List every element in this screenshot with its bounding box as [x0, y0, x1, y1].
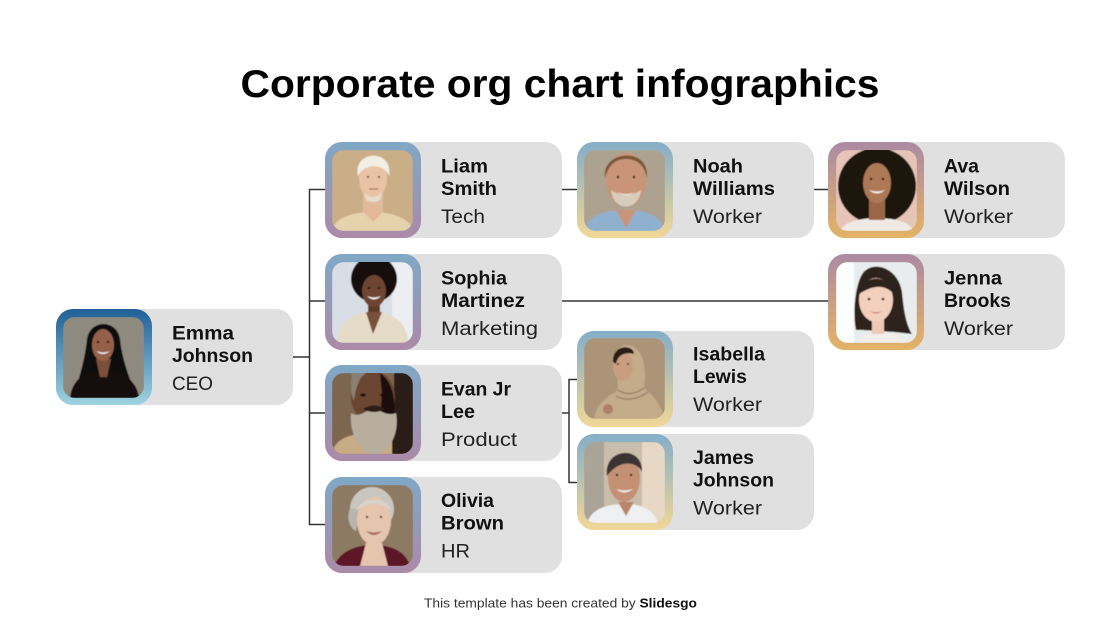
photo frame: [325, 365, 421, 461]
photo frame: [828, 254, 924, 350]
portrait: Noah: [584, 150, 665, 231]
card: Olivia Brown, HR: [325, 477, 562, 573]
portrait: Olivia: [332, 485, 413, 566]
card: Evan Jr Lee, Product: Lee: [441, 402, 475, 423]
role: Tech: [441, 207, 485, 228]
portrait: Jenna: [836, 262, 917, 343]
card: Ava Wilson, Worker: Wilson: [944, 179, 1010, 200]
portrait: Evan: [332, 371, 413, 454]
card: Noah Williams, Worker: [577, 142, 814, 238]
name: Olivia: [441, 491, 494, 512]
role: Product: [441, 430, 518, 451]
card: Sophia Martinez, Marketing: Martinez: [441, 291, 525, 312]
photo frame: [577, 331, 673, 427]
portrait: Liam: [332, 150, 413, 231]
name: Sophia: [441, 268, 507, 290]
photo frame: [828, 142, 924, 238]
name: Evan Jr: [441, 380, 512, 400]
name: Isabella: [693, 344, 765, 366]
card: Olivia Brown, HR: Brown: [441, 514, 504, 534]
portrait: Sophia: [332, 256, 413, 343]
role: CEO: [172, 374, 213, 395]
photo frame: [577, 434, 673, 530]
name: Jenna: [944, 268, 1002, 290]
footer credit: This template has been created by Slidesgo: [424, 596, 697, 610]
name: Ava: [944, 156, 979, 178]
title: Corporate org chart infographics: [240, 63, 880, 106]
role: Worker: [944, 319, 1014, 340]
connector lines: [293, 190, 828, 524]
card: Emma Johnson, CEO: Johnson: [172, 346, 253, 367]
name: Liam: [441, 156, 488, 178]
card: Jenna Brooks, Worker: [828, 254, 1065, 350]
photo frame: [325, 142, 421, 238]
card: Isabella Lewis, Worker: [577, 331, 814, 427]
card: James Johnson, Worker: Johnson: [693, 470, 774, 492]
card: Liam Smith, Tech: [325, 142, 562, 238]
name: James: [693, 448, 754, 469]
role: Worker: [693, 207, 763, 228]
card: James Johnson, Worker: [577, 434, 814, 530]
card: Isabella Lewis, Worker: Lewis: [693, 367, 747, 388]
portrait: Emma: [63, 317, 144, 398]
card: Evan Jr Lee, Product: [325, 365, 562, 461]
role: HR: [441, 542, 470, 562]
card: Sophia Martinez, Marketing: [325, 254, 562, 350]
card: Liam Smith, Tech: Smith: [441, 179, 497, 200]
role: Worker: [693, 498, 763, 520]
name: Emma: [172, 324, 234, 344]
card: Ava Wilson, Worker: [828, 142, 1065, 238]
portrait: Ava: [836, 148, 917, 231]
photo frame: [56, 309, 152, 405]
name: Noah: [693, 156, 743, 178]
portrait: James: [584, 442, 665, 523]
photo frame: [325, 254, 421, 350]
role: Worker: [693, 395, 763, 416]
role: Marketing: [441, 319, 538, 340]
photo frame: [325, 477, 421, 573]
photo frame: [577, 142, 673, 238]
card: Noah Williams, Worker: Williams: [693, 179, 775, 200]
card: Jenna Brooks, Worker: Brooks: [944, 291, 1011, 312]
card: Emma Johnson, CEO: [56, 309, 293, 405]
portrait: Isabella: [584, 338, 665, 419]
role: Worker: [944, 207, 1014, 228]
